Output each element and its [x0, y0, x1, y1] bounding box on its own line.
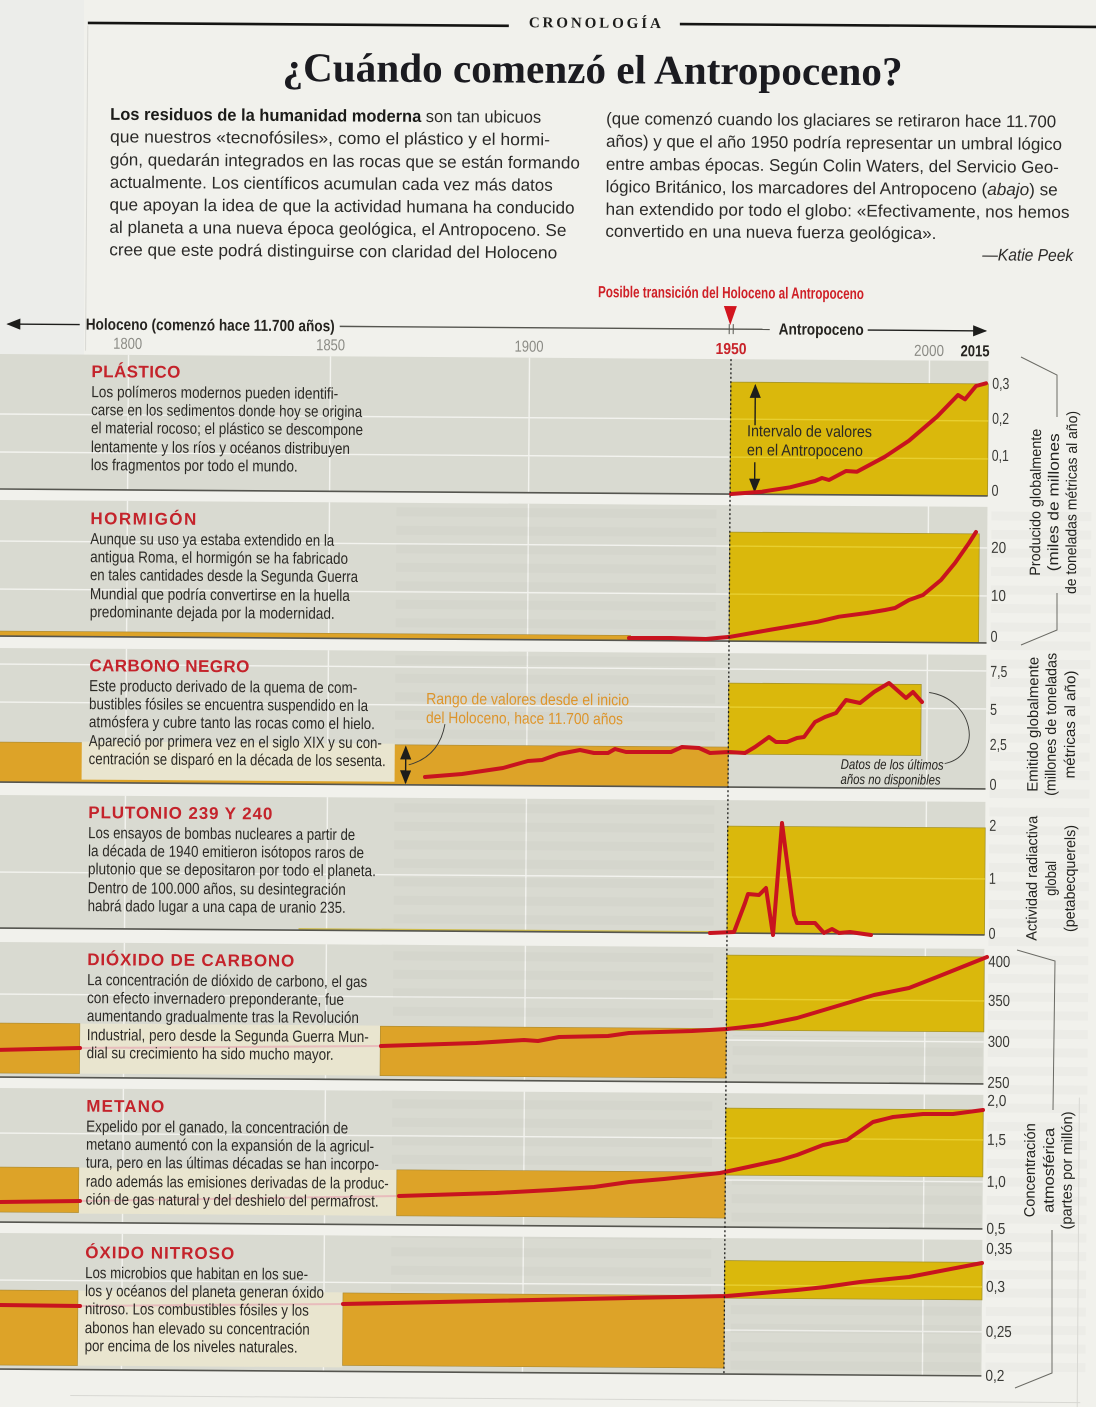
line: carbono negro [425, 683, 922, 777]
year labels [113, 336, 990, 360]
text block: carbono negro [89, 678, 386, 770]
intro text: left column: Los residuos de la humanidad moderna son tan ubicuos [110, 105, 541, 127]
year labels: 2000 [914, 343, 944, 360]
text block: hormigón: Mundial que podría convertirse en la huella [90, 586, 350, 605]
intro text: right column: lógico Británico, los marcadores del Antropoceno (abajo) se [606, 177, 1058, 199]
axis tick labels: 1 [989, 871, 996, 888]
axis title: emitido globalmente [1024, 653, 1079, 796]
axis title: actividad radiactiva: (petabecquerels) [1062, 825, 1079, 932]
intro text: left column: que apoyan la idea de que la actividad humana ha conducido [110, 195, 575, 218]
axis title: emitido globalmente: Emitido globalmente [1024, 657, 1042, 792]
line: dióxido de carbono [381, 957, 987, 1046]
intro text: left column: al planeta a una nueva época geológica, el Antropoceno. Se [109, 218, 566, 240]
heading: óxido nitroso: ÓXIDO NITROSO [85, 1243, 234, 1263]
text block: hormigón: antigua Roma, el hormigón se ha fabricado [90, 549, 348, 568]
intro text: left column: cree que este podrá distinguirse con claridad del Holoceno [109, 240, 557, 262]
intro text: left column: gón, quedarán integrados en las rocas que se están formando [110, 150, 580, 173]
line: hormigón [629, 532, 976, 639]
axis title: concentración atmosférica: atmosférica [1041, 1127, 1058, 1213]
text block: plástico [91, 384, 363, 476]
text block: carbono negro: centración se disparó en la década de los sesenta. [89, 751, 386, 770]
bracket: production axis [1021, 357, 1057, 645]
text block: plutonio [88, 825, 376, 917]
text block: metano: ción de gas natural y del deshielo del permafrost. [86, 1192, 379, 1211]
axis title: actividad radiactiva: Actividad radiactiva [1023, 815, 1041, 941]
icon: red triangle marker [724, 306, 737, 325]
line: óxido nitroso [343, 1263, 982, 1304]
intro text: right column: —Katie Peek [981, 245, 1075, 265]
intro text: right column: han extendido por todo el globo: «Efectivamente, nos hemos [605, 200, 1070, 222]
text block: metano: rado además las emisiones derivadas de la produc- [86, 1174, 389, 1193]
text block: hormigón: predominante dejada por la modernidad. [90, 604, 335, 623]
text block: plástico: lentamente y los ríos y océanos distribuyen [91, 439, 350, 458]
axis title: concentración atmosférica: (partes por millón) [1058, 1111, 1076, 1230]
text block: metano: tura, pero en las últimas décadas se han incorpo- [86, 1155, 379, 1174]
intro text: left column: actualmente. Los científicos acumulan cada vez más datos [110, 173, 553, 195]
section header: cronología [88, 11, 1096, 35]
callout: rango de valores: Rango de valores desde el inicio [426, 691, 629, 709]
year labels: 1900 [515, 339, 544, 356]
axis title: concentración atmosférica [1021, 1111, 1076, 1230]
callout: intervalo de valores: Intervalo de valores [747, 423, 872, 441]
text block: plutonio: la década de 1940 emitieron isótopos raros de [88, 843, 364, 862]
axis title: producido globalmente [1027, 411, 1081, 594]
text block: plástico: los fragmentos por todo el mundo. [91, 457, 298, 476]
line: metano, holocene left [0, 1201, 80, 1202]
axis tick labels: 250 [987, 1075, 1010, 1092]
intro text: left column [109, 105, 580, 263]
panel: plástico [0, 354, 989, 496]
text block: metano: Expelido por el ganado, la concentración de [86, 1119, 348, 1137]
leader line: missing data [929, 693, 970, 764]
panel: carbono negro [0, 648, 986, 789]
axis tick labels: 350 [988, 993, 1010, 1010]
text block: plástico: carse en los sedimentos donde hoy se origina [91, 402, 362, 421]
year labels: 1800 [113, 336, 142, 353]
line: metano [399, 1110, 983, 1196]
axis tick labels: 0,25 [986, 1324, 1012, 1341]
axis title: producido globalmente: de toneladas métricas al año) [1063, 411, 1081, 594]
text block: plutonio: habrá dado lugar a una capa de uranio 235. [88, 898, 346, 917]
axis tick labels: 300 [988, 1034, 1010, 1051]
text block: hormigón: Aunque su uso ya estaba extendido en la [90, 531, 334, 550]
text block: metano: metano aumentó con la expansión de la agricul- [86, 1137, 374, 1156]
year labels: 1950 [716, 341, 747, 358]
text block: carbono negro: Este producto derivado de la quema de com- [89, 678, 357, 697]
intro text: right column: entre ambas épocas. Según Colin Waters, del Servicio Geo- [606, 155, 1059, 177]
panel: hormigón [0, 500, 987, 643]
text block: óxido nitroso: Los microbios que habitan en los sue- [85, 1265, 308, 1284]
text block: óxido nitroso: abonos han elevado su concentración [85, 1320, 310, 1339]
holoceno arrow: Holoceno (comenzó hace 11.700 años) [86, 317, 335, 335]
axis tick labels: 1,5 [987, 1132, 1006, 1149]
axis tick labels: 0 [988, 926, 996, 943]
line: plutonio [710, 823, 871, 935]
axis title: producido globalmente: (miles de millones [1045, 433, 1063, 571]
axis tick labels: 0,35 [986, 1241, 1012, 1258]
note: datos no disponibles [841, 756, 944, 788]
text block: dióxido de carbono: dial su crecimiento ha sido mucho mayor. [87, 1045, 334, 1064]
heading: hormigón: HORMIGÓN [90, 509, 196, 529]
panel: metano [0, 1088, 984, 1229]
axis tick labels: 0 [992, 483, 999, 500]
axis tick labels: 0 [989, 777, 997, 794]
line: dióxido de carbono, holocene left [0, 1048, 80, 1050]
section header: cronología: CRONOLOGÍA [529, 14, 661, 32]
bracket: atmospheric axis [1015, 950, 1055, 1388]
text block: óxido nitroso: los y océanos del planeta generan óxido [85, 1283, 324, 1302]
text block: dióxido de carbono [87, 972, 369, 1064]
heading: carbono negro: CARBONO NEGRO [89, 656, 249, 676]
axis tick labels: 0,2 [985, 1368, 1005, 1385]
axis tick labels: 0,5 [986, 1221, 1006, 1238]
axis tick labels: 5 [990, 702, 997, 719]
holoceno arrow [8, 316, 770, 338]
text block: plástico: el material rocoso; el plástico se descompone [91, 420, 363, 439]
intro text: left column: que nuestros «tecnofósiles», como el plástico y el hormi- [110, 127, 550, 149]
text block: dióxido de carbono: con efecto invernadero preponderante, fue [87, 990, 344, 1009]
arrow: range down [754, 462, 756, 491]
year labels: 1850 [316, 337, 345, 354]
heading: dióxido de carbono: DIÓXIDO DE CARBONO [87, 950, 294, 971]
text block: dióxido de carbono: Industrial, pero desde la Segunda Guerra Mun- [87, 1027, 369, 1046]
axis title: emitido globalmente: (millones de toneladas [1042, 653, 1060, 796]
text block: dióxido de carbono: La concentración de dióxido de carbono, el gas [87, 972, 367, 991]
text block: óxido nitroso [85, 1265, 324, 1357]
panel: óxido nitroso [0, 1233, 982, 1376]
intro text: right column [605, 109, 1076, 265]
text block: plutonio: plutonio que se depositaron por todo el planeta. [88, 861, 376, 880]
text block: hormigón [90, 531, 358, 623]
note: datos no disponibles: años no disponibles [841, 771, 941, 788]
axis title: actividad radiactiva [1023, 815, 1079, 941]
axis title: emitido globalmente: métricas al año) [1062, 670, 1079, 779]
axis tick labels: 0 [991, 629, 998, 646]
intro text: right column: años) y que el año 1950 podría representar un umbral lógico [606, 132, 1062, 154]
text block: óxido nitroso: nitroso. Los combustibles fósiles y los [85, 1301, 309, 1320]
axis tick labels: 7,5 [990, 664, 1007, 681]
axis tick labels [985, 376, 1018, 1385]
axis title: concentración atmosférica: Concentración [1022, 1123, 1039, 1217]
1950 dotted divider [724, 359, 731, 1374]
leader line: holocene range [409, 724, 445, 765]
callout: intervalo de valores [747, 423, 872, 460]
line: óxido nitroso, holocene left [0, 1305, 80, 1306]
text block: metano [86, 1119, 389, 1211]
axis tick labels: 2,0 [987, 1093, 1006, 1110]
arrow: range up [754, 385, 756, 425]
text block: carbono negro: atmósfera y cubre tanto las rocas como el hielo. [89, 714, 375, 733]
axis tick labels: 0,3 [992, 376, 1009, 393]
text block: hormigón: en tales cantidades desde la Segunda Guerra [90, 567, 358, 586]
intro text: right column: convertido en una nueva fuerza geológica». [605, 222, 936, 243]
heading: plástico: PLÁSTICO [91, 362, 180, 382]
axis tick labels: 0,2 [992, 411, 1009, 428]
intro text: right column: (que comenzó cuando los glaciares se retiraron hace 11.700 [606, 109, 1056, 131]
text block: óxido nitroso: por encima de los niveles naturales. [85, 1338, 298, 1357]
axis title: producido globalmente: Producido globalmente [1027, 429, 1045, 576]
heading: plutonio: PLUTONIO 239 Y 240 [88, 803, 272, 823]
text block: dióxido de carbono: aumentando gradualmente tras la Revolución [87, 1008, 359, 1027]
axis tick labels: 10 [991, 588, 1006, 605]
panel: dióxido de carbono [0, 942, 988, 1084]
callout: intervalo de valores: en el Antropoceno [747, 442, 863, 460]
panel: plutonio [0, 795, 985, 937]
callout: rango de valores: del Holoceno, hace 11.700 años [426, 710, 623, 728]
axis tick labels: 2 [989, 818, 996, 835]
axis tick labels: 1,0 [987, 1174, 1006, 1191]
axis title: actividad radiactiva: global [1043, 861, 1060, 896]
axis tick labels: 2,5 [990, 737, 1007, 754]
heading: metano: METANO [86, 1097, 164, 1116]
year labels: 2015 [961, 343, 990, 360]
axis tick labels: 20 [991, 540, 1006, 557]
text block: plástico: Los polímeros modernos pueden identifi- [91, 384, 338, 403]
antropoceno arrow: Antropoceno [779, 321, 864, 339]
text block: plutonio: Dentro de 100.000 años, su desintegración [88, 880, 346, 899]
timeline header [8, 280, 990, 360]
text block: carbono negro: Apareció por primera vez en el siglo XIX y su con- [89, 733, 382, 752]
text block: carbono negro: bustibles fósiles se encuentra suspendido en la [89, 696, 368, 715]
arrow: holocene range [405, 747, 407, 783]
axis tick labels: 0,1 [992, 448, 1009, 465]
line: plástico [731, 383, 986, 494]
title: ¿Cuándo comenzó el Antropoceno? [282, 44, 903, 94]
axis tick labels: 0,3 [986, 1279, 1005, 1296]
text block: plutonio: Los ensayos de bombas nucleares a partir de [88, 825, 355, 844]
callout: rango de valores [426, 691, 629, 728]
transition label: Posible transición del Holoceno al Antropoceno [598, 284, 864, 303]
note: datos no disponibles: Datos de los últimos [841, 756, 944, 773]
axis tick labels: 400 [988, 954, 1010, 971]
